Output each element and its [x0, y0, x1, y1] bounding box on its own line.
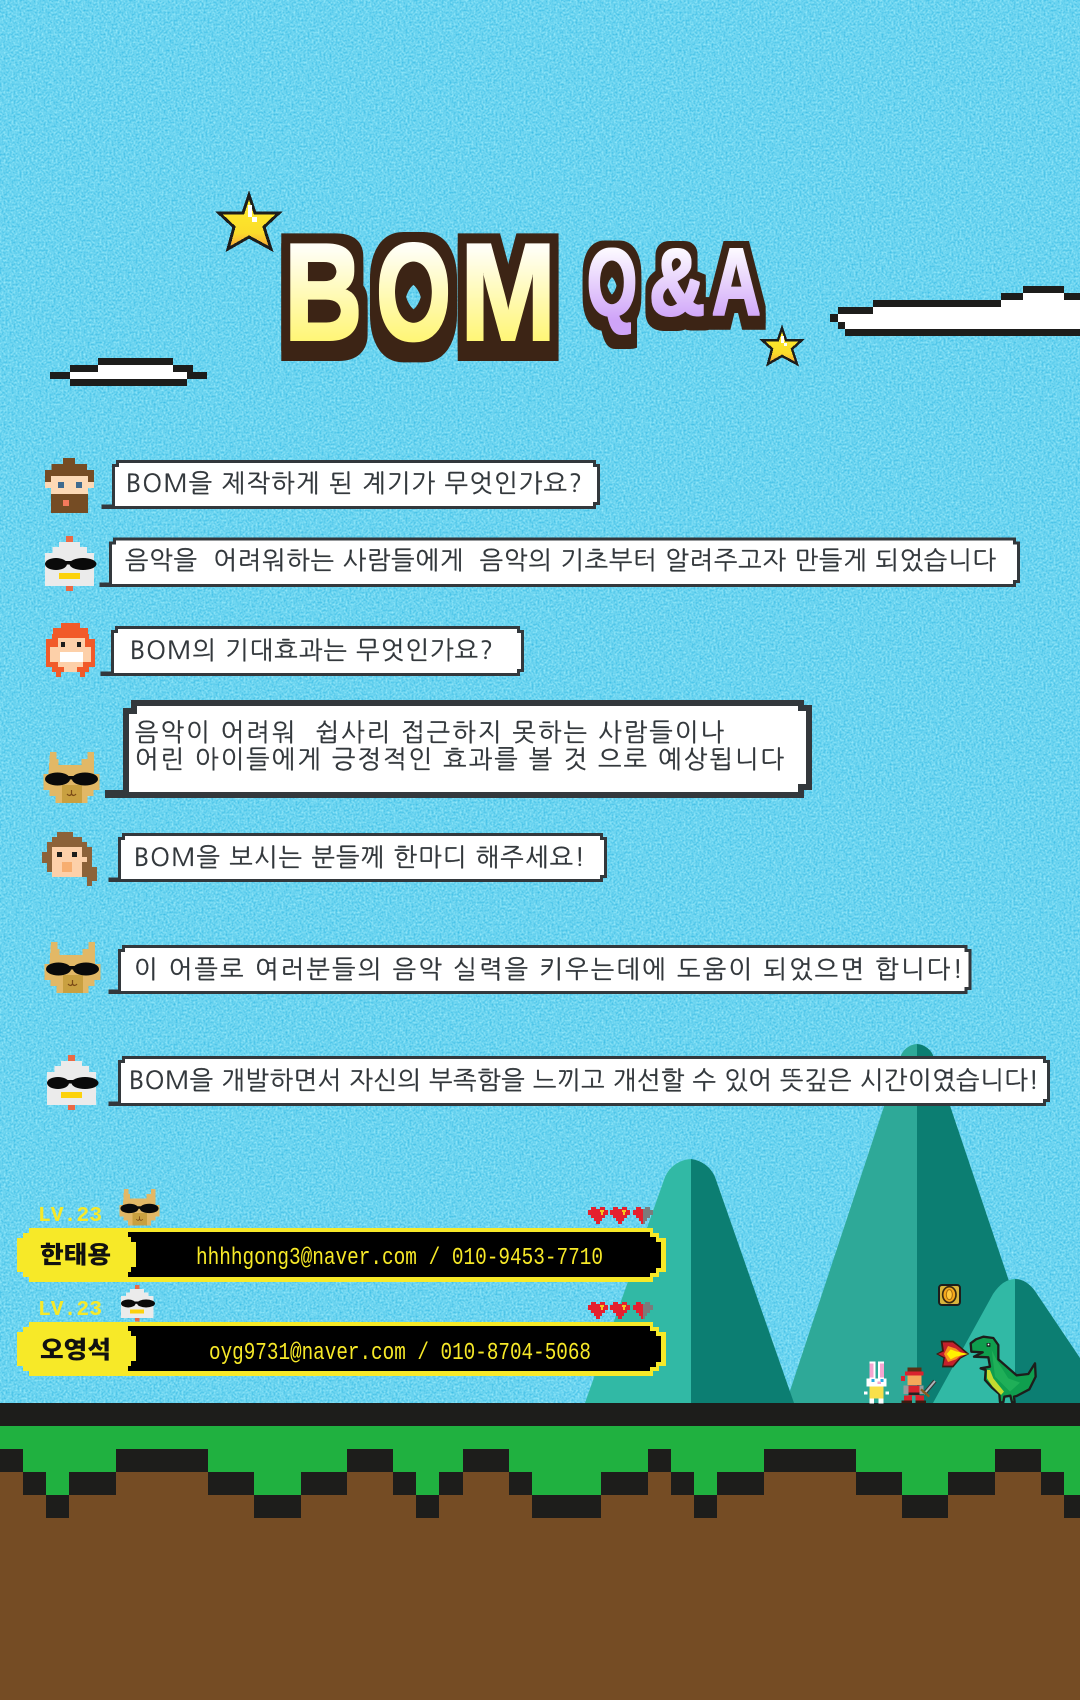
icon: fire breath [936, 1341, 969, 1367]
icon: big star [219, 195, 279, 249]
mountains [585, 1044, 1080, 1403]
icon: chicken avatar [47, 1055, 98, 1110]
speech bubble 4: 어린 아이들에게 긍정적인 효과를 볼 것 으로 예상됩니다 [135, 747, 784, 772]
icon: dog avatar [44, 942, 100, 993]
dialogue row 2 [45, 536, 1018, 591]
dialogue row 5 [42, 832, 606, 886]
speech bubble 1 [103, 462, 598, 508]
title: Q&A [587, 228, 761, 336]
title: Q&A: & [649, 228, 705, 336]
speech bubble 1: BOM을 제작하게 된 계기가 무엇인가요? [126, 471, 582, 496]
title: BOM: M [460, 216, 556, 368]
speech bubble 7: BOM을 개발하면서 자신의 부족함을 느끼고 개선할 수 있어 뜻깊은 시간이였습니다! [129, 1068, 1039, 1093]
right mountain [933, 1279, 1080, 1403]
bar [17, 1322, 666, 1376]
speech bubble 2: 음악을 어려워하는 사람들에게 음악의 기초부터 알려주고자 만들게 되었습니다 [125, 548, 996, 573]
dialogue row 6 [44, 942, 970, 993]
speech bubble 6: 이 어플로 여러분들의 음악 실력을 키우는데에 도움이 되었으면 합니다! [134, 957, 963, 982]
speech bubble 3 [102, 628, 522, 674]
icon: small star [762, 328, 802, 364]
title: BOM [284, 216, 556, 369]
icon: hearts [588, 1207, 653, 1224]
title: Q&A: Q [587, 229, 637, 336]
profile card 2 [17, 1285, 666, 1376]
speech bubble 2 [101, 539, 1018, 586]
name: 오영석 [40, 1337, 111, 1364]
speech bubble 3: BOM의 기대효과는 무엇인가요? [130, 638, 493, 663]
title: BOM: O [376, 216, 451, 368]
icon: hero with sword [901, 1368, 935, 1403]
speech bubble 5: BOM을 보시는 분들께 한마디 해주세요! [134, 845, 585, 870]
icon: orange-haired avatar [46, 623, 95, 677]
icon: dog mini avatar [119, 1189, 160, 1226]
title [284, 216, 761, 369]
icon: dog avatar [44, 752, 100, 803]
name: 한태용 [40, 1242, 111, 1269]
level label: LV.23 [38, 1205, 102, 1228]
speech bubble 7 [110, 1058, 1048, 1104]
ground [0, 1403, 1080, 1700]
cloud left [50, 358, 207, 386]
icon: rabbit [864, 1362, 889, 1403]
icon: chicken mini avatar [121, 1285, 155, 1321]
speech bubble 5 [110, 834, 606, 880]
cloud right [830, 286, 1080, 336]
icon: brown-haired woman avatar [42, 832, 97, 886]
dialogue row 4 [44, 703, 809, 803]
profile card 1 [17, 1189, 666, 1282]
icon: chicken avatar [45, 536, 96, 591]
dialogue row 7 [47, 1055, 1048, 1110]
icon: bearded man avatar [45, 458, 94, 513]
game sprites [864, 1285, 1036, 1403]
speech bubble 4: 음악이 어려워 쉽사리 접근하지 못하는 사람들이나 [135, 720, 724, 745]
icon: hearts [588, 1302, 653, 1319]
big mountain [786, 1044, 1050, 1403]
dialogue row 3 [46, 623, 522, 677]
left mountain [585, 1159, 794, 1403]
contact: hhhhgong3@naver.com / 010-9453-7710 [196, 1245, 603, 1272]
speech bubble 6 [110, 946, 970, 992]
bar [17, 1228, 666, 1282]
icon: green dinosaur [971, 1337, 1036, 1402]
level label: LV.23 [38, 1299, 102, 1322]
speech bubble 4 [108, 703, 809, 795]
icon: coin [939, 1285, 960, 1305]
contact: oyg9731@naver.com / 010-8704-5068 [209, 1340, 591, 1367]
title: Q&A: A [712, 228, 761, 336]
title: BOM: B [284, 218, 363, 369]
dialogue row 1 [45, 458, 598, 513]
